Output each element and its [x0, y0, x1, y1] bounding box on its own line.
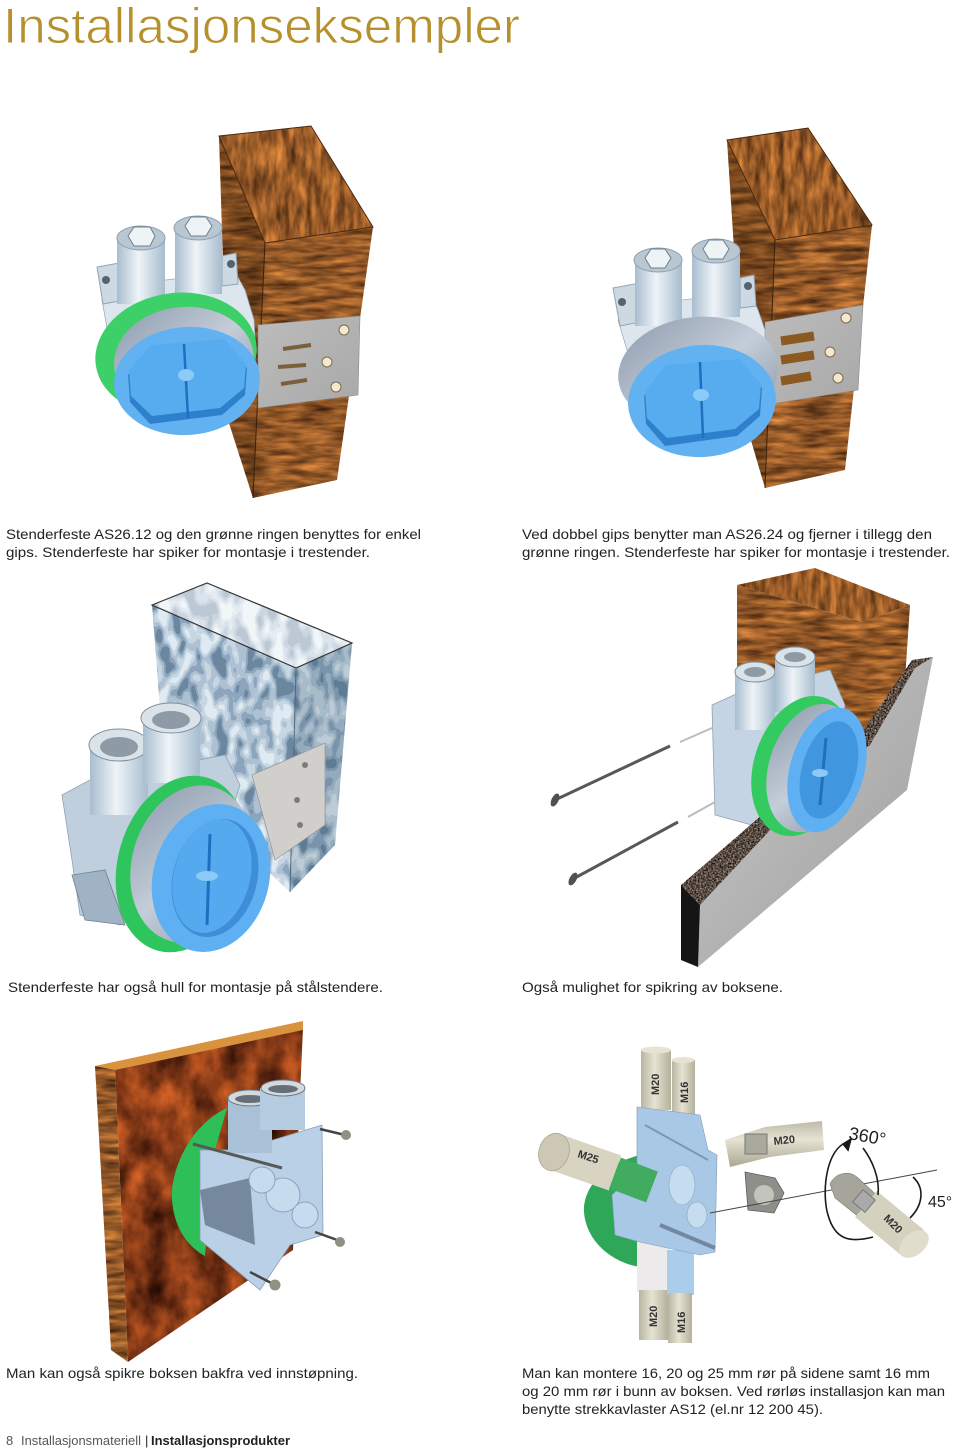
footer	[6, 1433, 290, 1448]
bracket ears	[613, 275, 756, 326]
box lower tabs	[72, 870, 125, 925]
panel: stud mount with green ring	[87, 120, 380, 505]
mounting plate	[765, 305, 863, 405]
grey collar	[613, 309, 783, 435]
caption 1: gips. Stenderfeste har spiker for montasje i trestender.	[6, 544, 370, 560]
box body	[618, 292, 765, 360]
box body	[200, 1125, 323, 1290]
detached M20 pipe	[725, 1121, 824, 1167]
angle arrow 45 degrees	[910, 1177, 952, 1218]
box body	[62, 755, 240, 925]
M25 pipe	[534, 1129, 652, 1187]
detached M20 pipe: M20	[773, 1134, 796, 1148]
caption 6: og 20 mm rør i bunn av boksen. Ved rørløs installasjon kan man	[522, 1383, 945, 1399]
green ring	[734, 683, 870, 849]
blue cover	[774, 698, 880, 842]
panel: pipe options diagram	[534, 1046, 952, 1343]
green ring	[87, 282, 265, 426]
caption 6: Man kan montere 16, 20 og 25 mm rør på sidene samt 16 mm	[522, 1365, 930, 1381]
detached fitting	[745, 1172, 784, 1213]
caption 2: Ved dobbel gips benytter man AS26.24 og fjerner i tillegg den	[522, 526, 932, 542]
grey collar	[110, 301, 258, 421]
caption 1: Stenderfeste AS26.12 og den grønne ringen benyttes for enkel	[6, 526, 421, 542]
elbow with M20 pipe: M20	[881, 1213, 905, 1236]
gypsum board	[675, 650, 937, 967]
mounting plate	[252, 743, 325, 860]
caption 3: Stenderfeste har også hull for montasje på stålstendere.	[8, 979, 383, 995]
caption 4: Også mulighet for spikring av boksene.	[522, 979, 783, 995]
caption 5: Man kan også spikre boksen bakfra ved innstøpning.	[6, 1365, 358, 1381]
footer: 8	[6, 1433, 13, 1448]
upper pipes: M16	[679, 1082, 691, 1103]
nails	[193, 1129, 351, 1290]
box body	[612, 1107, 717, 1255]
nails	[549, 728, 715, 887]
caption 1	[6, 526, 421, 560]
caption 2: grønne ringen. Stenderfeste har spiker for montasje i trestender.	[522, 544, 950, 560]
upper pipes	[641, 1046, 695, 1116]
upper pipes: M20	[650, 1074, 662, 1095]
footer: |	[145, 1433, 148, 1448]
green ring	[584, 1155, 655, 1267]
panel: nailing through gypsum	[549, 560, 937, 967]
green ring	[96, 760, 268, 968]
wooden stud	[737, 568, 910, 730]
blue cover	[624, 340, 780, 462]
lower pipes	[637, 1240, 694, 1343]
box body	[102, 272, 255, 345]
caption 2	[522, 526, 950, 560]
lower pipes: M16	[676, 1312, 688, 1333]
caption 6: benytte strekkavlaster AS12 (el.nr 12 200 45).	[522, 1401, 823, 1417]
green ring	[172, 1108, 227, 1256]
conduit pipes	[117, 216, 222, 304]
blue cover	[110, 322, 264, 440]
grey collar	[112, 771, 272, 957]
conduit pipes	[89, 703, 201, 815]
wooden stud	[726, 128, 873, 488]
footer: Installasjonsmateriell	[21, 1433, 141, 1448]
grey collar	[751, 692, 873, 844]
panel: double gypsum without green ring	[613, 120, 880, 495]
caption 6	[522, 1365, 945, 1417]
axis line	[710, 1170, 937, 1213]
panel: nailed from behind for casting	[92, 1020, 351, 1365]
steel stud	[150, 580, 355, 895]
mounting plate	[258, 316, 360, 408]
panel: steel stud mount	[62, 580, 355, 968]
elbow with M20 pipe	[830, 1173, 934, 1263]
bracket ears	[97, 253, 238, 304]
conduit pipes	[228, 1080, 305, 1153]
blue cover	[136, 791, 286, 965]
footer: Installasjonsprodukter	[151, 1433, 290, 1448]
lower pipes: M20	[648, 1306, 660, 1327]
rotation arrow 360 degrees: 360°	[847, 1123, 887, 1149]
M25 pipe: M25	[576, 1148, 600, 1166]
box and pipes	[712, 647, 845, 830]
wooden board	[92, 1020, 308, 1365]
angle arrow 45 degrees: 45°	[928, 1194, 952, 1211]
wooden stud	[218, 126, 374, 498]
rotation arrow 360 degrees	[825, 1123, 887, 1240]
conduit pipes	[634, 239, 740, 326]
